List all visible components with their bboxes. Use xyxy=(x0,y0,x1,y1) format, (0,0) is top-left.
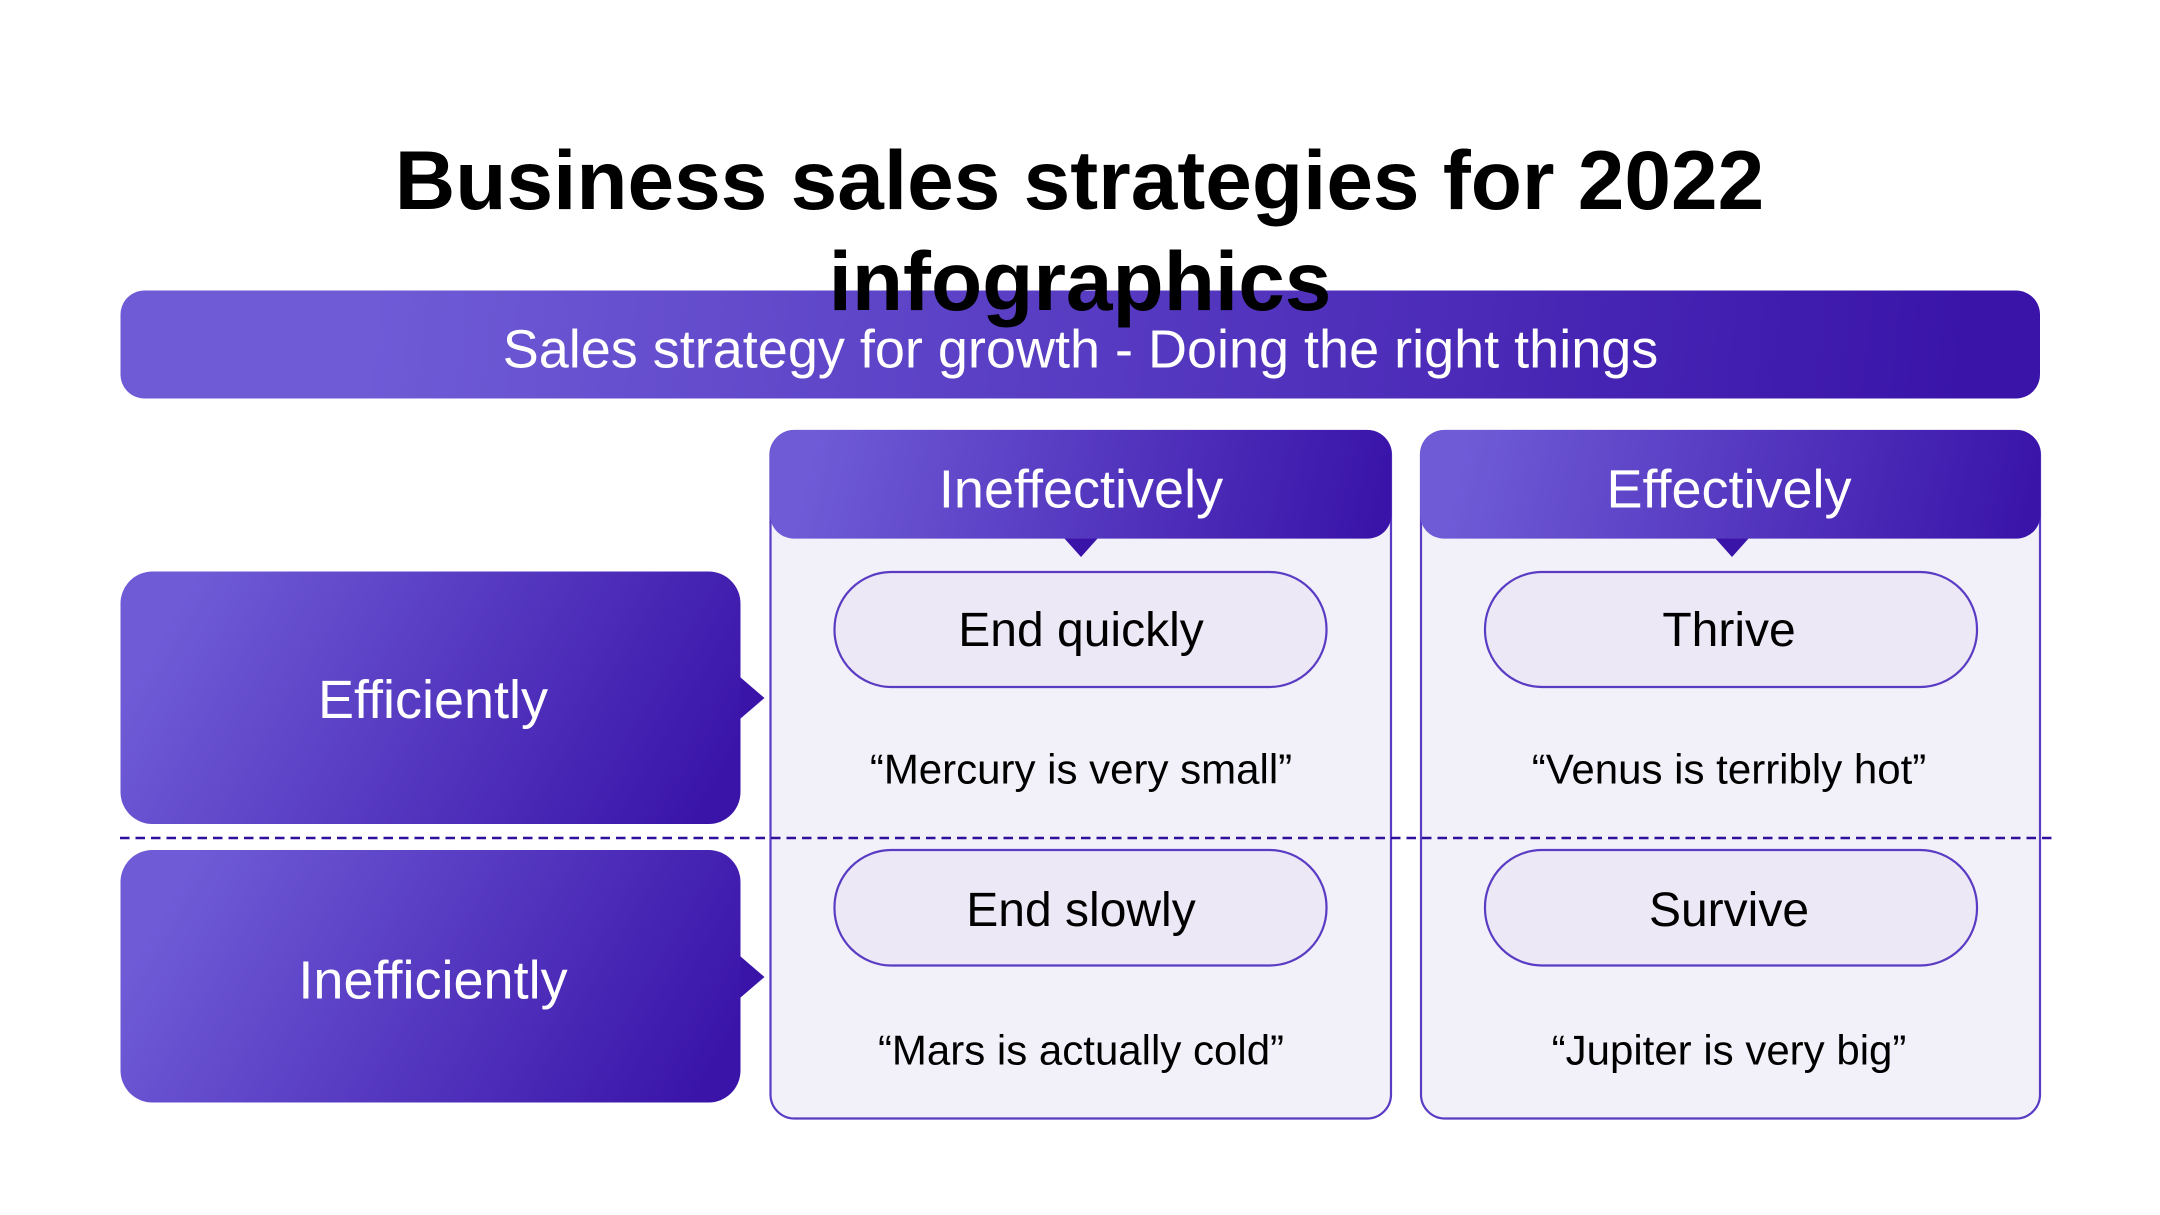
row label: efficiently xyxy=(120,572,764,824)
pill: end quickly xyxy=(834,572,1326,687)
pill: survive: Survive xyxy=(1649,884,1809,937)
row label: efficiently: Efficiently xyxy=(318,670,548,730)
pill: end quickly: End quickly xyxy=(958,604,1204,657)
pill: thrive xyxy=(1485,572,1977,687)
banner: sales strategy for growth xyxy=(120,290,2040,398)
pill: end slowly: End slowly xyxy=(966,884,1196,937)
pill: survive xyxy=(1485,850,1977,966)
row label: inefficiently: Inefficiently xyxy=(298,950,568,1010)
quote: venus: “Venus is terribly hot” xyxy=(1532,746,1926,792)
panel: effectively column xyxy=(1420,430,2040,1118)
quote: jupiter: “Jupiter is very big” xyxy=(1552,1026,1906,1074)
row label: inefficiently xyxy=(120,850,764,1102)
panel: effectively column: Effectively xyxy=(1606,460,1852,520)
title: Business sales strategies for 2022 xyxy=(395,133,1764,227)
pill: thrive: Thrive xyxy=(1662,604,1796,657)
title xyxy=(395,133,1764,328)
panel: ineffectively column: Ineffectively xyxy=(939,460,1223,520)
banner: sales strategy for growth: Sales strategy for growth - Doing the right things xyxy=(503,320,1658,380)
panel: ineffectively column xyxy=(770,430,1392,1118)
title: infographics xyxy=(829,234,1331,328)
pill: end slowly xyxy=(834,850,1326,966)
quote: mercury: “Mercury is very small” xyxy=(870,746,1292,792)
quote: mars: “Mars is actually cold” xyxy=(878,1026,1284,1074)
